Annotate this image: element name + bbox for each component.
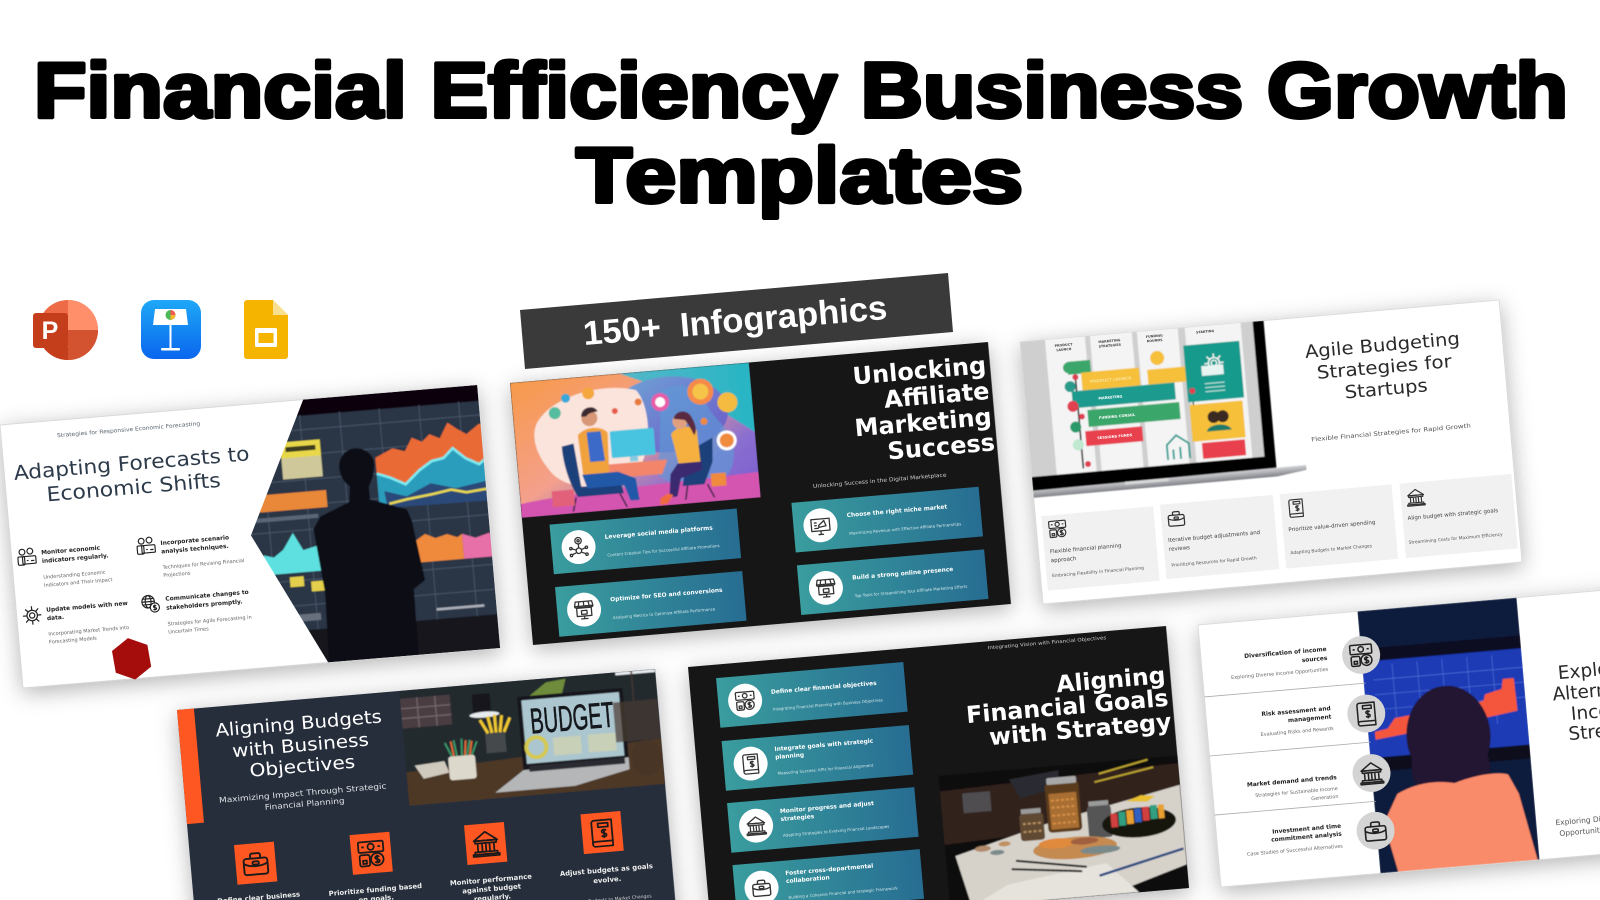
card: value-driven: Prioritize value-driven spending — [1288, 520, 1376, 533]
row: market: Market demand and trends — [1247, 775, 1338, 789]
item: update models: Forecasting Models — [49, 636, 97, 646]
pillar: prioritize funding — [324, 829, 423, 900]
photo: budget laptop: BUDGET — [528, 694, 616, 742]
card: strategic goals: Streamlining Costs for Maximum Efficiency — [1408, 532, 1503, 546]
card: flexible planning — [1041, 506, 1160, 591]
item: scenarios: Projections — [163, 571, 191, 579]
person silhouette — [313, 448, 426, 662]
subtitle — [1555, 810, 1600, 838]
card: cross-departmental — [732, 849, 924, 900]
row: diversification: sources — [1302, 656, 1328, 664]
photo: coins and charts — [938, 755, 1189, 900]
heading: Economic Shifts — [46, 468, 222, 506]
card: cross-departmental: Foster cross-departmental — [785, 864, 874, 877]
slide: Exploring Alternative Income — [1198, 584, 1600, 887]
card: social media: Leverage social media platforms — [605, 526, 714, 541]
item: monitor: Monitor economic — [41, 546, 101, 556]
heading: Unlocking — [851, 351, 987, 391]
laptop image: PRODUCT LAUNCH — [1090, 375, 1132, 384]
heading: Aligning — [1055, 661, 1166, 698]
eyebrow text: Strategies for Responsive Economic Forecasting — [57, 421, 200, 439]
card: monitor progress — [727, 787, 919, 853]
item: update models: data. — [47, 615, 64, 622]
card: cross-departmental: collaboration — [786, 875, 830, 885]
heading — [849, 351, 996, 468]
heading: Adapting Forecasts to — [13, 441, 250, 485]
row: market: Generation — [1311, 794, 1339, 802]
card: strategic goals — [1400, 474, 1518, 558]
card: SEO: Analyzing Metrics to Optimize Affiliate Performance — [613, 606, 716, 620]
row: diversification: Exploring Diverse Income Opportunities — [1231, 667, 1329, 681]
card: SEO — [555, 571, 747, 637]
title: Financial Efficiency Business Growth — [34, 46, 1568, 134]
icon: PowerPoint: P — [42, 317, 58, 345]
subtitle: Financial Planning — [264, 796, 345, 812]
card: iterative — [1160, 495, 1279, 579]
row: diversification: Diversification of income — [1244, 647, 1327, 660]
row: investment: commitment analysis — [1271, 832, 1343, 844]
title — [34, 46, 1568, 219]
heading: Financial Goals — [965, 684, 1169, 729]
heading: with Strategy — [988, 708, 1173, 751]
row dividers — [1204, 683, 1376, 815]
item: communicate: Uncertain Times — [168, 626, 209, 636]
laptop image: FUNDING CONSUL — [1099, 413, 1136, 420]
card: iterative: Prioritizing Resources for Rapid Growth — [1171, 555, 1257, 569]
accent bar — [177, 709, 204, 824]
slide: Adapting Forecasts — [0, 383, 502, 692]
card: integrate goals: Integrate goals with strategic — [774, 739, 874, 753]
slide background — [177, 669, 678, 900]
card: social media: Content Creation Tips for Successful Affiliate Promotions — [607, 543, 720, 558]
heading: Success — [886, 428, 996, 466]
heading: Strategies for — [1316, 351, 1453, 384]
card: define objectives — [716, 662, 908, 728]
row: investment — [1244, 810, 1396, 861]
illustration: two people at desk — [510, 363, 761, 518]
item: scenarios: analysis techniques. — [161, 544, 229, 555]
subtitle: Maximizing Impact Through Strategic — [219, 782, 387, 805]
item: communicate: Strategies for Agile Forecasting in — [167, 615, 252, 628]
banner — [520, 273, 953, 369]
banner: 150+ Infographics — [582, 289, 889, 353]
card: strategic goals: Align budget with strategic goals — [1407, 508, 1499, 522]
pillar: business goals — [213, 840, 301, 900]
photo: analyst at chart wall — [251, 385, 500, 662]
heading — [963, 661, 1173, 753]
item: scenarios — [136, 529, 245, 581]
card: online presence — [797, 549, 988, 615]
card: iterative: Iterative budget adjustments and — [1168, 530, 1260, 544]
row: market: Strategies for Sustainable Income — [1255, 786, 1338, 799]
laptop image: FUNDING — [1146, 333, 1163, 339]
card: niche — [791, 487, 983, 552]
card: integrate goals: Measuring Success: KPIs for Financial Alignment — [777, 763, 874, 776]
slide: Unlocking Affiliate Marketing — [510, 342, 1011, 645]
card: SEO: Optimize for SEO and conversions — [610, 588, 723, 603]
item: monitor: indicators regularly. — [42, 553, 109, 565]
heading: Startups — [1344, 375, 1429, 403]
heading: with Business — [231, 730, 370, 762]
pillar: prioritize funding: Prioritize funding based — [328, 882, 422, 898]
laptop image: ROUNDS — [1147, 338, 1163, 343]
title: Templates — [576, 131, 1023, 219]
laptop image: LAUNCH — [1056, 347, 1072, 352]
card: define objectives: Define clear financial objectives — [771, 681, 877, 696]
heading — [13, 441, 252, 509]
card: online presence: Top Tools for Streamlining Your Affiliate Marketing Efforts — [854, 584, 968, 598]
pillar: monitor performance — [445, 820, 534, 900]
card: monitor progress: strategies — [780, 814, 815, 823]
item: monitor: Understanding Economic — [43, 570, 106, 581]
heading: Objectives — [249, 752, 356, 782]
card: flexible planning: Flexible financial planning — [1050, 543, 1122, 555]
card: iterative: reviews — [1169, 545, 1190, 553]
laptop image: MARKETING — [1098, 395, 1123, 401]
row: risk: Evaluating Risks and Rewards — [1260, 726, 1334, 738]
subtitle: Flexible Financial Strategies for Rapid Growth — [1311, 422, 1471, 443]
row: risk: management — [1288, 715, 1332, 724]
item: update models: Incorporating Market Trends into — [48, 625, 129, 638]
row: risk — [1258, 693, 1387, 742]
heading: Affiliate — [883, 377, 990, 414]
slide background — [510, 342, 1011, 645]
card: value-driven — [1280, 484, 1398, 569]
laptop image: PRODUCT — [1054, 342, 1073, 348]
card: value-driven: Adapting Budgets to Market Changes — [1290, 543, 1373, 556]
item: communicate — [141, 587, 253, 638]
photo: woman at chart screen — [1357, 598, 1540, 873]
card: cross-departmental: Building a Cohesive Financial and Strategic Framework — [788, 885, 899, 900]
pillar: adjust budgets: Adjust budgets as goals — [560, 862, 653, 878]
heading — [1550, 655, 1600, 746]
slide background — [688, 626, 1189, 900]
item: update models — [22, 598, 131, 648]
pillar: adjust budgets — [555, 809, 656, 900]
card: monitor progress: Adapting Strategies to Evolving Financial Landscapes — [783, 824, 889, 838]
heading: Marketing — [853, 403, 993, 442]
heading: Agile Budgeting — [1304, 329, 1461, 363]
card: define objectives: Integrating Financial Planning with Business Objectives — [773, 697, 883, 712]
icon: Google Slides — [244, 300, 288, 359]
item: monitor — [17, 542, 113, 591]
photo: budget laptop — [399, 669, 665, 806]
card: niche: Choose the right niche market — [846, 504, 948, 519]
icon: Keynote — [141, 300, 201, 359]
subtitle: Unlocking Success in the Digital Marketplace — [813, 472, 948, 490]
card: integrate goals: planning — [775, 753, 804, 761]
slide: Aligning Budgets — [177, 669, 678, 900]
laptop image — [1020, 318, 1307, 498]
icon: PowerPoint — [33, 300, 98, 360]
row: risk: Risk assessment and — [1261, 706, 1331, 718]
slide background — [1198, 584, 1600, 887]
pillar: adjust budgets: evolve. — [593, 875, 622, 885]
item: scenarios: Techniques for Revising Financial — [161, 558, 245, 571]
slide: Aligning Financial Goals — [688, 626, 1189, 900]
laptop image: STARTING — [1196, 329, 1215, 335]
slide background — [1020, 300, 1522, 604]
laptop image: SESSIONS FUNDS — [1097, 433, 1133, 440]
red hexagon — [110, 635, 153, 683]
slide background — [0, 385, 500, 688]
subtitle — [219, 782, 388, 816]
card: social media — [550, 509, 741, 574]
pillar: monitor performance: Monitor performance — [450, 873, 533, 888]
slide: Agile Budgeting — [1020, 300, 1522, 604]
row: investment: Case Studies of Successful Alternatives — [1247, 844, 1344, 858]
item: communicate: stakeholders promptly. — [166, 599, 243, 612]
item: update models: Update models with new — [46, 601, 129, 614]
laptop image: MARKETING — [1098, 338, 1121, 344]
heading — [1304, 329, 1464, 407]
row: diversification — [1229, 635, 1382, 685]
item: scenarios: Incorporate scenario — [160, 535, 229, 547]
heading — [215, 706, 386, 784]
card: monitor progress: Monitor progress and adjust — [780, 801, 874, 815]
card: niche: Maximizing Revenue with Effective Affiliate Partnerships — [849, 521, 961, 536]
heading: Aligning Budgets — [215, 706, 383, 742]
row: investment: Investment and time — [1272, 824, 1341, 836]
pillar: monitor performance: against budget — [462, 882, 522, 895]
card: flexible planning: Embracing Flexibility in Financial Planning — [1052, 565, 1144, 579]
app icons — [33, 300, 288, 360]
card: flexible planning: approach — [1051, 556, 1077, 564]
row: market — [1245, 753, 1393, 808]
item: monitor: Indicators and Their Impact — [44, 577, 113, 589]
item: communicate: Communicate changes to — [165, 590, 249, 603]
card: online presence: Build a strong online presence — [852, 567, 954, 582]
eyebrow text: Integrating Vision with Financial Objectives — [988, 635, 1107, 651]
laptop image: STRATEGIES — [1098, 343, 1122, 349]
card: integrate goals — [722, 725, 913, 791]
